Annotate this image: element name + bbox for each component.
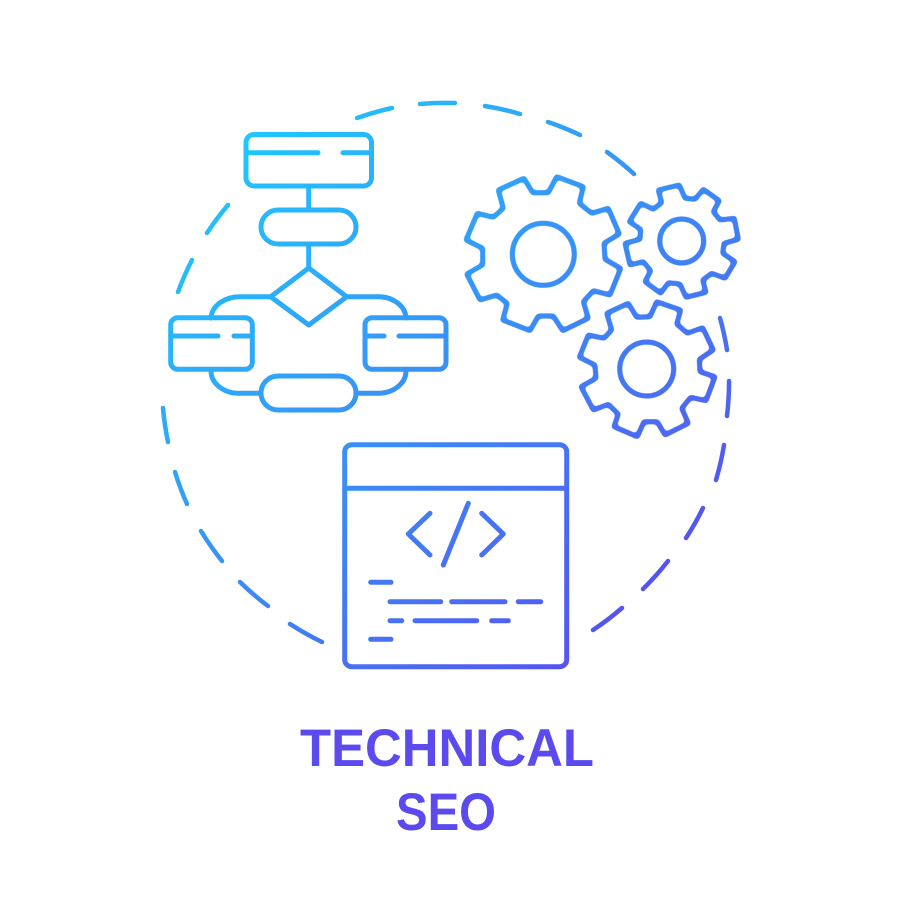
title xyxy=(300,719,594,842)
small gear xyxy=(625,185,738,297)
code lines xyxy=(371,582,541,639)
icon: gears xyxy=(466,177,738,437)
lower gear xyxy=(579,302,715,437)
large gear xyxy=(466,177,621,331)
dashed circle xyxy=(163,103,729,642)
icon: flowchart xyxy=(171,134,446,410)
title: SEO xyxy=(396,783,496,842)
code brackets xyxy=(408,503,503,565)
icon: code window xyxy=(345,445,567,667)
title: TECHNICAL xyxy=(300,719,594,778)
